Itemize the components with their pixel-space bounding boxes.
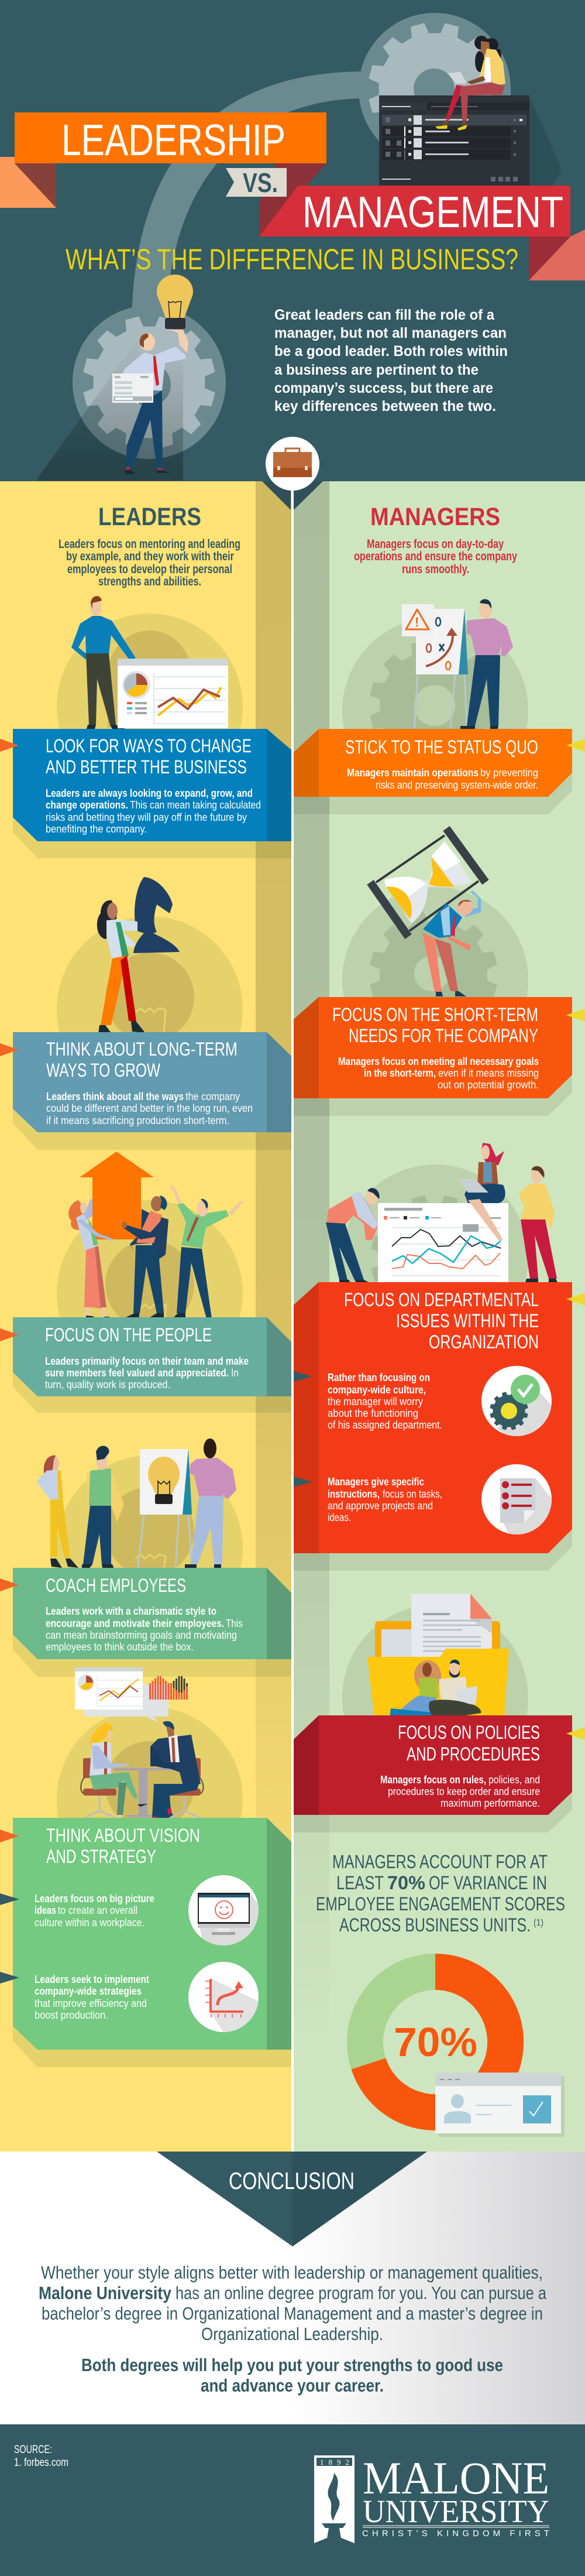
illustration: man with light bulb <box>112 275 193 475</box>
conclusion text: and advance your career. <box>201 2375 384 2396</box>
banner: stick to the status quo <box>294 729 572 797</box>
banner: think about long-term: THINK ABOUT LONG-TERM <box>46 1039 238 1060</box>
logo: malone university: MALONE <box>363 2452 549 2503</box>
banner: look for ways to change: Leaders are always looking to expand, grow, and <box>46 787 253 799</box>
banner: focus on the people: In <box>231 1366 239 1379</box>
icon: top gear <box>359 13 511 165</box>
column side stripes <box>256 481 329 2152</box>
icon: document checklist <box>481 1464 552 1534</box>
logo: malone university: UNIVERSITY <box>363 2493 549 2529</box>
arrow markers: leaders <box>0 739 19 1842</box>
heading: managers intro <box>354 503 517 576</box>
tail: orange ribbon <box>0 157 56 208</box>
footer <box>0 2424 585 2576</box>
statistic text: (1) <box>534 1918 543 1928</box>
banner: think about long-term: the company <box>185 1090 240 1102</box>
illustration: analytics chart with colleagues <box>326 1143 558 1283</box>
heading: leaders intro: LEADERS <box>98 503 201 531</box>
source <box>14 2444 68 2469</box>
conclusion text: Malone University <box>39 2283 172 2303</box>
departmental text: culture: company-wide culture, <box>328 1383 426 1396</box>
banner: stick to the status quo: Managers maintain operations <box>347 766 479 779</box>
banner: think about long-term: WAYS TO GROW <box>46 1060 161 1081</box>
banner: think about long-term: Leaders think about all the ways <box>46 1090 184 1102</box>
banner: think about vision: THINK ABOUT VISION <box>46 1825 200 1846</box>
vision text: big picture <box>35 1892 154 1928</box>
heading: managers intro: MANAGERS <box>370 503 500 531</box>
conclusion heading: CONCLUSION <box>229 2167 355 2194</box>
banner: focus on policies: Managers focus on rules, <box>380 1773 486 1786</box>
heading: managers intro: operations and ensure the company <box>354 550 517 563</box>
conclusion text: Both degrees will help you put your strengths to good use <box>81 2355 503 2375</box>
heading: managers intro: runs smoothly. <box>402 563 469 576</box>
gear shadow <box>36 340 183 481</box>
banner: coach employees: Leaders work with a charismatic style to <box>46 1605 216 1617</box>
illustration: meeting with chart bubble <box>75 1667 204 1825</box>
intro text: Great leaders can fill the role of a <box>274 307 495 323</box>
banner: focus on the short-term: Managers focus on meeting all necessary goals <box>338 1055 539 1067</box>
vision text: strategies: that improve efficiency and <box>35 1997 147 2009</box>
banner: coach employees: encourage and motivate their employees. <box>46 1617 224 1629</box>
top fold triangles <box>262 481 323 510</box>
banner: look for ways to change: LOOK FOR WAYS TO CHANGE <box>46 735 252 756</box>
banner: look for ways to change: risks and betting they will pay off in the future by <box>46 811 247 823</box>
banner: coach employees: COACH EMPLOYEES <box>46 1575 186 1596</box>
intro text <box>274 307 508 415</box>
center line <box>291 486 294 515</box>
connector path between gears <box>132 71 366 328</box>
vision text: strategies: boost production. <box>35 2009 108 2021</box>
banner: focus on the short-term <box>294 997 572 1098</box>
panel: conclusion background <box>0 2152 585 2424</box>
statistic text: LEAST <box>336 1872 384 1893</box>
banner: think about long-term <box>13 1032 291 1132</box>
banner: stick to the status quo: risks and preserving system-wide order. <box>376 779 538 791</box>
banner: focus on the people <box>13 1317 291 1396</box>
banner: focus on the short-term: out on potential growth. <box>438 1078 539 1091</box>
banner: focus on the people: Leaders primarily focus on their team and make <box>45 1355 249 1367</box>
heading: leaders intro: by example, and they work with their <box>66 550 234 563</box>
banner: coach employees: This <box>226 1617 243 1629</box>
heading: leaders intro: strengths and abilities. <box>98 575 201 588</box>
heading: leaders intro: employees to develop their personal <box>67 563 232 576</box>
departmental text: culture: Rather than focusing on <box>328 1371 430 1383</box>
illustration: team lifting arrow <box>68 1152 243 1325</box>
banner: look for ways to change: change operations. <box>46 799 128 811</box>
banner: focus on departmental issues <box>294 1282 572 1553</box>
vision text: big picture: to create an overall <box>58 1904 137 1916</box>
backdrop: managers gears <box>342 618 528 1791</box>
logo: malone university <box>314 2452 549 2543</box>
banner: look for ways to change <box>13 729 291 841</box>
statistic text: OF VARIANCE IN <box>429 1872 547 1893</box>
icon: gear with checkmark <box>481 1366 552 1436</box>
icon: monitor with smile <box>188 1875 259 1945</box>
banner: focus on policies: procedures to keep order and ensure <box>388 1785 540 1797</box>
departmental text: instructions: and approve projects and <box>328 1499 433 1512</box>
dashboard panel <box>379 95 562 186</box>
departmental text: culture: of his assigned department. <box>328 1419 442 1431</box>
vision text: big picture: ideas <box>35 1904 56 1916</box>
icon: briefcase <box>266 437 319 491</box>
statistic text <box>316 1851 565 1936</box>
departmental text: instructions <box>328 1475 442 1523</box>
vs tag: VS. <box>243 167 278 198</box>
banner: think about vision <box>13 1818 291 2050</box>
intro text: be a good leader. Both roles within <box>274 343 508 359</box>
vision text: big picture: culture within a workplace. <box>35 1916 144 1928</box>
center divider <box>291 481 294 2152</box>
intro text: manager, but not all managers can <box>274 325 507 341</box>
banner: focus on departmental issues: ORGANIZATION <box>429 1331 539 1352</box>
statistic text: ACROSS BUSINESS UNITS. <box>339 1914 531 1936</box>
conclusion text: Organizational Leadership. <box>201 2324 383 2344</box>
intro text: a business are pertinent to the <box>274 362 479 378</box>
backdrop: leaders bulbs <box>57 614 243 1893</box>
banner: look for ways to change: AND BETTER THE BUSINESS <box>46 756 247 777</box>
banner: focus on policies <box>294 1715 572 1815</box>
header background <box>0 0 585 481</box>
heading: managers intro: Managers focus on day-to-day <box>367 537 504 551</box>
source: 1. forbes.com <box>14 2457 68 2469</box>
departmental text: culture <box>328 1371 442 1431</box>
vision text: big picture: Leaders focus on big picture <box>35 1892 154 1904</box>
departmental text: instructions: instructions, <box>328 1488 380 1500</box>
banner: focus on policies: FOCUS ON POLICIES <box>398 1722 540 1743</box>
logo: malone university: 1892 <box>320 2458 349 2467</box>
banner: look for ways to change: benefiting the company. <box>46 823 147 835</box>
intro text: company’s success, but there are <box>274 380 493 396</box>
banner: coach employees: can mean brainstorming goals and motivating <box>46 1629 237 1641</box>
panel: leaders column <box>0 481 291 2152</box>
panel: managers column <box>294 481 585 2152</box>
conclusion text <box>39 2262 547 2396</box>
banner shadows: leaders <box>13 817 291 2067</box>
banner: focus on the people: FOCUS ON THE PEOPLE <box>45 1324 212 1345</box>
banner: coach employees <box>13 1568 291 1659</box>
arrow markers: managers <box>566 739 585 1740</box>
departmental text: instructions: focus on tasks, <box>383 1488 442 1500</box>
illustration: hourglass and man <box>370 828 486 996</box>
tail: red ribbon <box>529 229 585 280</box>
logo: malone university: CHRIST’S KINGDOM FIRST <box>362 2529 549 2539</box>
illustration: chess knight and woman <box>97 877 180 1035</box>
banner shadows: managers <box>294 773 572 1832</box>
banner: focus on policies: policies, and <box>488 1773 540 1786</box>
illustration: coaching group <box>36 1438 236 1571</box>
banner: think about long-term: if it means sacrificing production short-term. <box>46 1114 229 1126</box>
banner: focus on policies: AND PROCEDURES <box>407 1743 540 1765</box>
banner: focus on the short-term: even if it means missing <box>438 1067 539 1079</box>
illustration: flipchart and man <box>402 599 513 731</box>
banner: focus on departmental issues: ISSUES WITHIN THE <box>396 1310 539 1331</box>
statistic text: 70% <box>387 1872 425 1893</box>
illustration: woman on dashboard <box>435 36 505 131</box>
banner: leadership: LEADERSHIP <box>61 115 285 165</box>
banner: focus on the people: turn, quality work is produced. <box>45 1378 170 1390</box>
illustration: flipchart and man: ! <box>415 615 419 629</box>
vision text: strategies: Leaders seek to implement <box>35 1973 149 1985</box>
donut chart: 70 percent <box>365 1972 505 2112</box>
heading: leaders intro <box>58 503 240 588</box>
icon: lower gear <box>73 306 226 459</box>
departmental text: culture: about the functioning <box>328 1407 418 1419</box>
profile card <box>435 2073 565 2137</box>
banner: think about vision: AND STRATEGY <box>46 1846 156 1867</box>
banner: focus on the people: sure members feel valued and appreciated. <box>45 1366 229 1379</box>
intro text: key differences between the two. <box>274 398 496 415</box>
illustration: man with chart card <box>71 596 228 729</box>
departmental text: culture: the manager will worry <box>328 1395 424 1407</box>
conclusion heading <box>157 2152 427 2246</box>
banner: focus on policies: maximum performance. <box>441 1797 540 1809</box>
arrow markers: teal <box>0 1371 312 1984</box>
vision text: strategies: company-wide strategies <box>35 1985 142 1997</box>
departmental text: instructions: ideas. <box>328 1511 351 1523</box>
vision text: strategies <box>35 1973 149 2021</box>
fold: red ribbon <box>259 163 326 237</box>
banner: focus on the short-term: in the short-term, <box>364 1067 436 1079</box>
banner: look for ways to change: This can mean taking calculated <box>130 799 261 811</box>
departmental text: instructions: Managers give specific <box>328 1475 424 1488</box>
donut chart: 70 percent: 70% <box>394 2019 477 2065</box>
icon: rising chart <box>188 1962 260 2037</box>
illustration: folder with couple <box>367 1594 509 1722</box>
source: SOURCE: <box>14 2444 52 2456</box>
banner: coach employees: employees to think outside the box. <box>46 1640 194 1653</box>
banner: think about long-term: could be different and better in the long run, even <box>46 1102 253 1114</box>
heading: leaders intro: Leaders focus on mentoring and leading <box>58 537 240 551</box>
banner: stick to the status quo: by preventing <box>480 766 538 779</box>
